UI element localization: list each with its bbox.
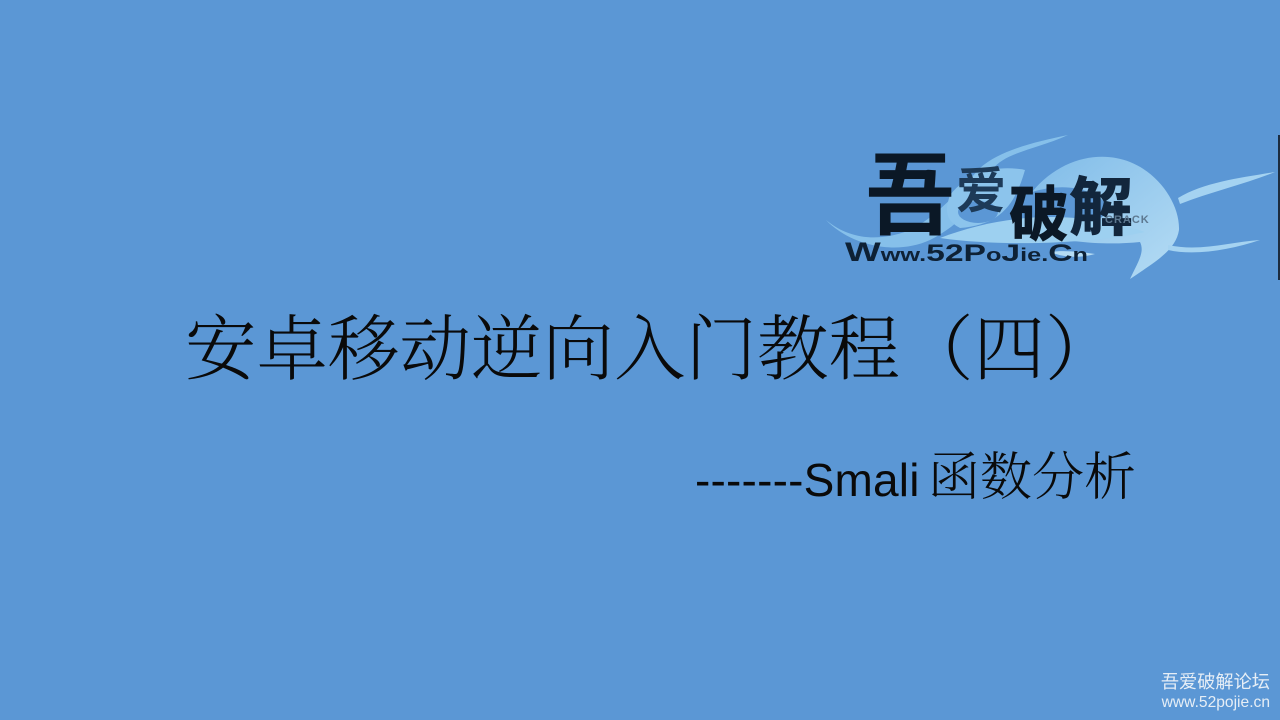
subtitle chinese part: 函数分析 — [928, 449, 1136, 507]
icon: fish swirl — [826, 135, 1275, 279]
logo url: W ww. 52P oJ ie. C n — [845, 237, 1088, 267]
subtitle — [695, 449, 1136, 507]
logo wordmark: chinese — [865, 123, 1133, 254]
right edge line — [1278, 135, 1280, 280]
logo: 52pojie — [826, 123, 1275, 279]
watermark name: 吾爱破解论坛 — [1161, 672, 1270, 692]
logo wordmark: chinese: 解 — [1069, 157, 1133, 249]
watermark url: www.52pojie.cn — [1162, 694, 1270, 711]
logo wordmark: chinese: 吾 — [865, 123, 955, 253]
subtitle latin part: -------Smali — [695, 454, 920, 506]
title: 安卓移动逆向入门教程（四） — [185, 311, 1117, 390]
logo wordmark: chinese: 破 — [1009, 167, 1069, 254]
watermark — [1161, 672, 1270, 711]
logo label: crack: CRACK — [1105, 214, 1150, 226]
logo wordmark: chinese: 爱 — [956, 151, 1006, 223]
